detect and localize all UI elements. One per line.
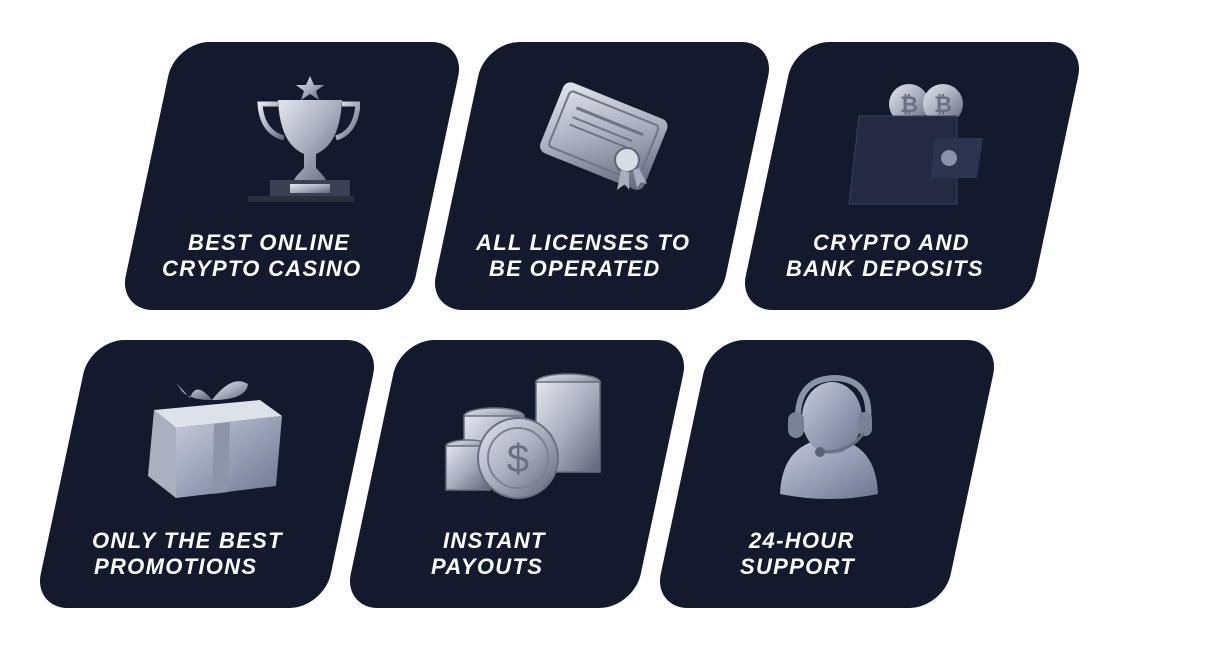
icon: coin stacks: $ bbox=[507, 437, 529, 481]
text: all licenses to be operated bbox=[476, 230, 690, 281]
icon: gift box bbox=[148, 381, 282, 498]
text: instant payouts: PAYOUTS bbox=[431, 554, 543, 579]
panel: best online crypto casino bbox=[119, 42, 465, 310]
text: instant payouts: INSTANT bbox=[443, 528, 546, 553]
icon: wallet with bitcoins bbox=[848, 84, 983, 204]
text: best online crypto casino: CRYPTO CASINO bbox=[162, 256, 361, 281]
text: best online crypto casino bbox=[162, 230, 361, 281]
icon: certificate bbox=[540, 82, 668, 190]
panel: 24-hour support bbox=[654, 340, 1000, 608]
text: crypto and bank deposits: CRYPTO AND bbox=[813, 230, 970, 255]
icon: support agent bbox=[780, 375, 878, 499]
panel: all licenses bbox=[429, 42, 775, 310]
panel: only the best promotions bbox=[34, 340, 380, 608]
text: all licenses to be operated: BE OPERATED bbox=[489, 256, 661, 281]
text: 24-hour support bbox=[740, 528, 856, 579]
icon: coin stacks bbox=[445, 373, 601, 499]
text: only the best promotions: ONLY THE BEST bbox=[92, 528, 283, 553]
text: instant payouts bbox=[431, 528, 546, 579]
text: only the best promotions bbox=[92, 528, 284, 579]
panel: crypto and bank deposits bbox=[739, 42, 1085, 310]
text: all licenses to be operated: ALL LICENSES TO bbox=[476, 230, 690, 255]
text: 24-hour support: 24-HOUR bbox=[749, 528, 855, 553]
text: 24-hour support: SUPPORT bbox=[740, 554, 855, 579]
text: crypto and bank deposits: BANK DEPOSITS bbox=[786, 256, 984, 281]
icon: wallet with bitcoins: ₿ bbox=[934, 92, 952, 117]
text: only the best promotions: PROMOTIONS bbox=[94, 554, 257, 579]
icon: trophy bbox=[248, 76, 360, 202]
panel: instant payouts bbox=[344, 340, 690, 608]
text: crypto and bank deposits bbox=[786, 230, 984, 281]
icon: wallet with bitcoins: ₿ bbox=[900, 92, 918, 117]
text: best online crypto casino: BEST ONLINE bbox=[188, 230, 350, 255]
